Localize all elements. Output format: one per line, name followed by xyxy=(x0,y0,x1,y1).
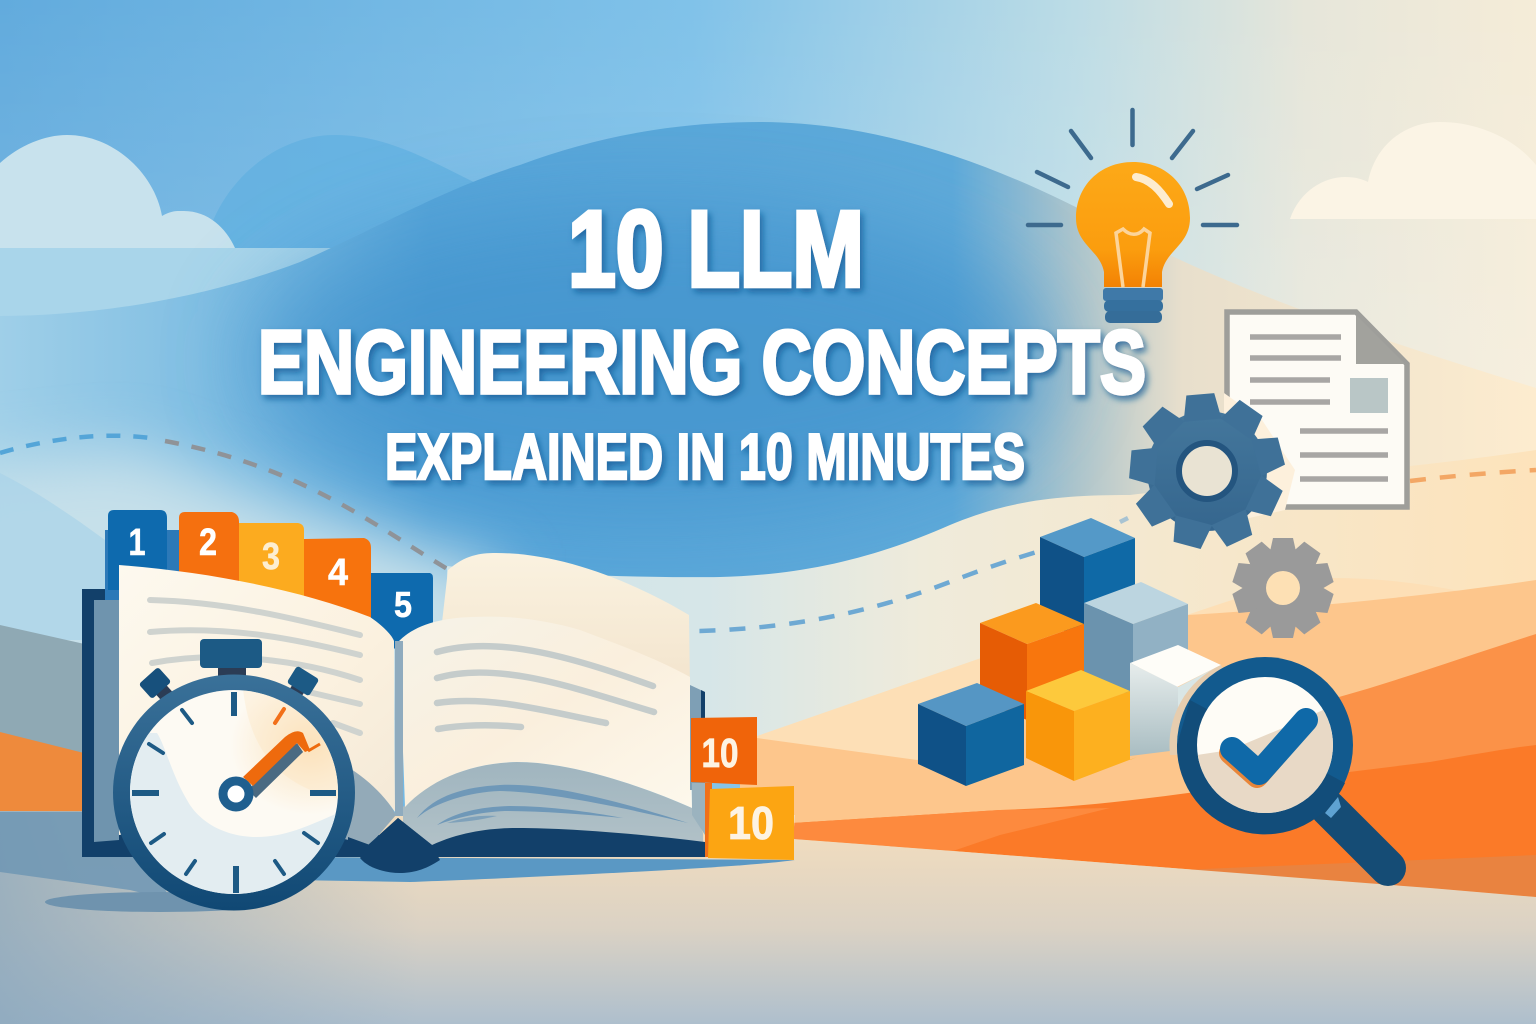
book illustration xyxy=(45,510,795,912)
stopwatch xyxy=(113,639,355,910)
hour ticks xyxy=(132,692,336,893)
tab 2 xyxy=(179,512,239,590)
glint xyxy=(1325,797,1341,818)
title line 1: 10 LLM xyxy=(568,188,864,309)
left side button xyxy=(139,667,177,706)
tab 10 lower xyxy=(705,783,794,860)
rays xyxy=(1028,110,1237,225)
lens face xyxy=(1197,677,1333,813)
back hill xyxy=(213,135,473,248)
stacked cubes xyxy=(918,518,1221,786)
dashed path: right section xyxy=(468,470,1536,631)
top blue cube xyxy=(1040,518,1135,640)
tab 4 xyxy=(304,538,371,640)
hand xyxy=(223,731,320,807)
handle xyxy=(1328,808,1388,868)
filament xyxy=(1116,229,1150,287)
small gear xyxy=(1231,538,1335,638)
white cube xyxy=(1130,645,1221,756)
yellow cube xyxy=(1026,670,1137,781)
deep orange band xyxy=(794,745,1536,870)
right page text lines xyxy=(437,646,654,729)
lens ring xyxy=(1177,657,1353,833)
glass xyxy=(1076,162,1190,287)
main hill xyxy=(0,122,1536,720)
doc image placeholder xyxy=(1350,378,1388,413)
bottom cover xyxy=(348,818,705,857)
spine foot xyxy=(360,818,440,873)
dashed path: left section xyxy=(0,436,470,582)
large gear xyxy=(1121,387,1295,556)
checkmark xyxy=(1230,720,1306,777)
highlight xyxy=(1136,177,1169,204)
lower wave xyxy=(447,450,1536,760)
right side button xyxy=(282,666,319,704)
tab 3: 3 xyxy=(262,536,280,578)
magnifying glass with check xyxy=(1169,657,1388,868)
right page stack xyxy=(403,762,703,850)
outer ring xyxy=(113,674,355,910)
lightbulb icon xyxy=(1028,110,1237,323)
spine xyxy=(395,641,403,816)
subtitle: EXPLAINED IN 10 MINUTES xyxy=(385,420,1025,493)
gear halo xyxy=(1224,393,1295,520)
orange cube xyxy=(980,603,1084,720)
left page xyxy=(119,565,395,835)
left cover xyxy=(82,589,400,857)
front blue cube xyxy=(918,683,1024,786)
shadow under clock xyxy=(45,892,275,912)
tab 10 upper: 10 xyxy=(702,730,738,776)
tab 5: 5 xyxy=(394,584,412,625)
doc lines xyxy=(1250,337,1388,479)
light haze lower left xyxy=(0,450,500,720)
tab 4: 4 xyxy=(328,552,348,594)
band beneath left cloud xyxy=(0,248,330,316)
right cover sliver xyxy=(690,685,705,790)
right page xyxy=(399,617,692,808)
peach hills xyxy=(757,578,1454,760)
title block xyxy=(258,188,1146,493)
grey blue cube xyxy=(1084,582,1188,697)
tab 10 lower: 10 xyxy=(728,797,774,849)
tab 1 xyxy=(105,510,179,600)
halo xyxy=(1169,665,1230,755)
tab 5 xyxy=(371,573,433,651)
sand xyxy=(0,811,1536,1024)
left orange xyxy=(0,732,82,812)
clock face xyxy=(130,690,338,894)
tab 3 xyxy=(239,523,304,600)
grey band xyxy=(0,625,82,752)
title glow xyxy=(250,210,1050,510)
tab 1: 1 xyxy=(128,522,146,564)
title line 2: ENGINEERING CONCEPTS xyxy=(258,313,1146,413)
tab 2: 2 xyxy=(199,522,217,564)
document icon xyxy=(1227,312,1407,507)
left page text lines xyxy=(150,600,360,733)
page stack left xyxy=(94,600,119,842)
cloud right xyxy=(1290,122,1536,219)
screw base xyxy=(1103,288,1163,323)
left page stack by spine xyxy=(340,760,396,845)
tab 10 upper xyxy=(691,717,757,785)
top crown xyxy=(200,639,262,679)
shadow under book xyxy=(290,857,795,882)
back right page xyxy=(440,553,690,690)
cloud left xyxy=(0,135,235,248)
